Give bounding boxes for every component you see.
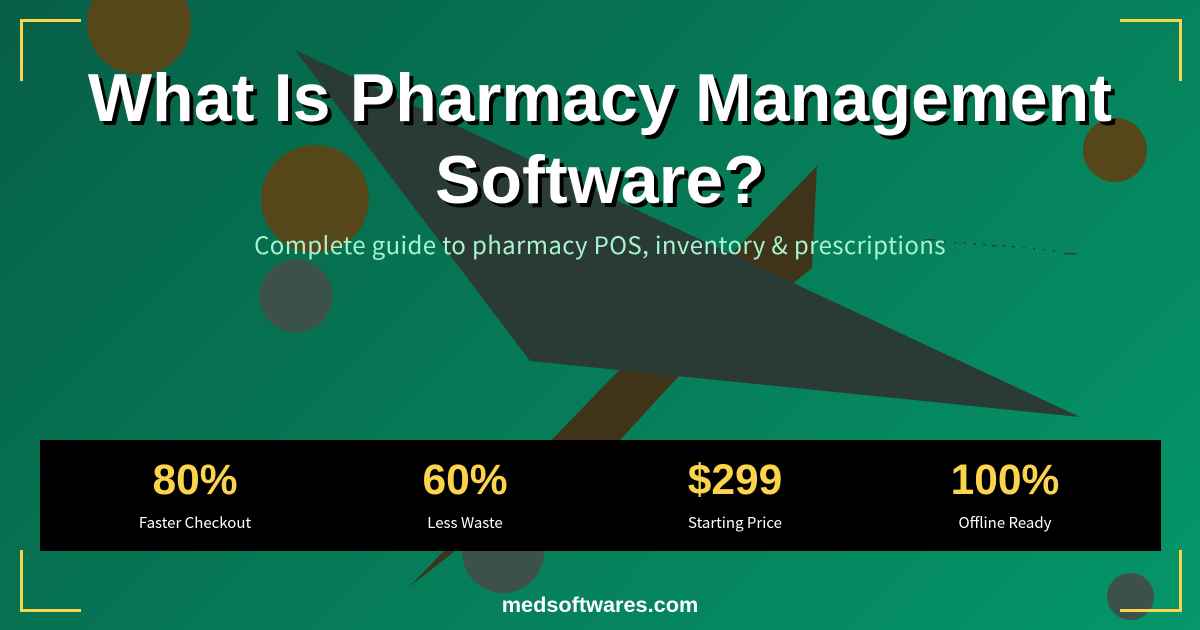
dashed sliver <box>925 239 1076 254</box>
title: Software? <box>435 142 765 218</box>
stat: faster checkout: Faster Checkout <box>139 512 251 533</box>
stat: faster checkout: 80% <box>152 457 238 504</box>
footer url: medsoftwares.com <box>502 592 698 617</box>
brown angular shape <box>409 166 817 587</box>
stat: starting price <box>688 457 782 533</box>
stat: offline ready <box>951 457 1059 533</box>
stat: less waste <box>422 457 508 533</box>
stat: less waste: 60% <box>422 457 508 504</box>
stat: starting price: Starting Price <box>688 512 782 533</box>
stat: starting price: $299 <box>688 457 782 504</box>
stat: faster checkout <box>139 457 251 533</box>
title: What Is Pharmacy Management <box>88 60 1112 136</box>
stat: less waste: Less Waste <box>427 512 503 533</box>
brown circles <box>87 0 1147 253</box>
dark angular shape <box>295 50 1080 417</box>
title <box>88 60 1116 218</box>
stats bar <box>40 440 1161 551</box>
stat: offline ready: Offline Ready <box>958 512 1052 533</box>
stat: offline ready: 100% <box>951 457 1059 504</box>
grey circles <box>260 260 1154 620</box>
subtitle: Complete guide to pharmacy POS, inventory & prescriptions <box>254 226 946 261</box>
